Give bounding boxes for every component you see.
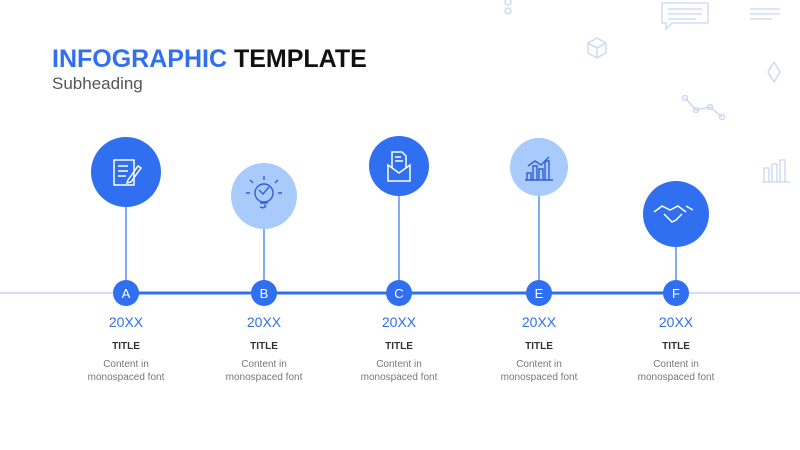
label A: TITLE xyxy=(112,341,140,352)
label B: 20XX xyxy=(247,314,281,330)
label E xyxy=(501,314,578,383)
label F: TITLE xyxy=(662,341,690,352)
icon: document xyxy=(91,137,161,207)
label B: TITLE xyxy=(250,341,278,352)
label F: monospaced font xyxy=(638,372,714,383)
label E: 20XX xyxy=(522,314,556,330)
label C: Content in xyxy=(376,359,422,370)
label E: monospaced font xyxy=(501,372,577,383)
timeline chart: A xyxy=(122,286,131,301)
timeline chart: B xyxy=(260,286,268,301)
label A: 20XX xyxy=(109,314,143,330)
label F: Content in xyxy=(653,359,699,370)
label A xyxy=(88,314,164,383)
icon: mail xyxy=(369,136,429,196)
subheading: Subheading xyxy=(52,74,143,93)
title: INFOGRAPHIC TEMPLATE xyxy=(52,45,367,73)
nodes xyxy=(113,280,689,306)
timeline chart: F xyxy=(672,286,680,301)
icon: handshake xyxy=(643,181,709,247)
label C: monospaced font xyxy=(361,372,437,383)
label A: monospaced font xyxy=(88,372,164,383)
label F xyxy=(638,314,714,383)
label F: 20XX xyxy=(659,314,693,330)
label C: 20XX xyxy=(382,314,416,330)
label B: Content in xyxy=(241,359,287,370)
icon: chart xyxy=(510,138,568,196)
label A: Content in xyxy=(103,359,149,370)
icon: bulb xyxy=(231,163,297,229)
label E: Content in xyxy=(516,359,562,370)
label B xyxy=(226,314,302,383)
label E: TITLE xyxy=(525,341,553,352)
label C xyxy=(361,314,438,383)
timeline chart: E xyxy=(535,286,544,301)
label B: monospaced font xyxy=(226,372,302,383)
label C: TITLE xyxy=(385,341,413,352)
timeline chart: C xyxy=(394,286,404,301)
